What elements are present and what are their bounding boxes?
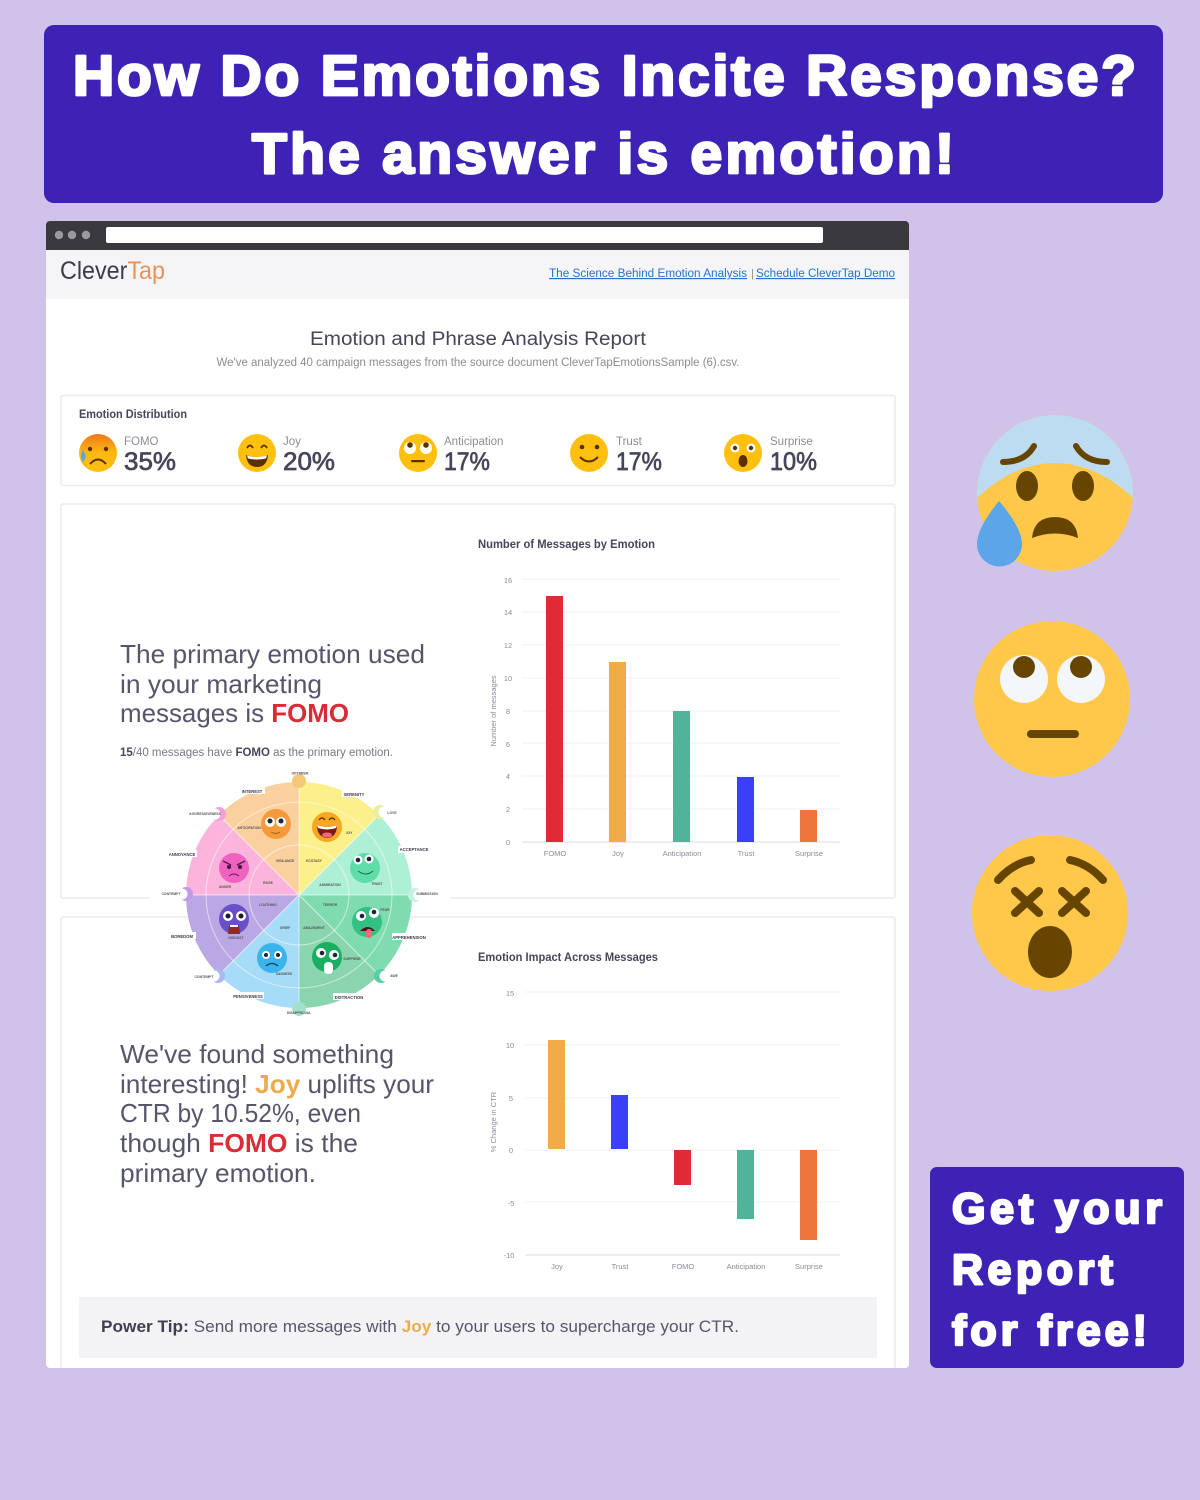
call to action box: Get your — [952, 1185, 1162, 1233]
stat: Trust: Trust — [616, 436, 643, 448]
bar chart: number of messages by emotion: 14 — [504, 608, 512, 617]
stat: Trust: 17% — [616, 448, 662, 476]
title banner: The answer is emotion! — [252, 122, 954, 186]
impact statement: interesting! Joy uplifts your — [120, 1069, 434, 1099]
bar chart: emotion impact across messages: 5 — [509, 1094, 513, 1103]
wheel face: anticipation — [261, 809, 291, 839]
stat: FOMO: 35% — [124, 448, 176, 476]
stat: FOMO: FOMO — [124, 436, 159, 448]
browser window report — [46, 221, 909, 1368]
wheel labels: LOVE — [387, 811, 397, 815]
bar chart: number of messages by emotion: 6 — [506, 740, 510, 749]
report header bar — [46, 250, 909, 299]
bar chart: number of messages by emotion: 12 — [504, 641, 512, 650]
stat: Trust — [570, 434, 662, 476]
wheel labels: SERENITY — [344, 792, 365, 797]
wheel labels: ANGER — [219, 885, 232, 889]
wheel labels: TRUST — [371, 882, 384, 886]
wheel labels: ANTICIPATION — [237, 826, 261, 830]
wheel labels: TERROR — [323, 903, 338, 907]
wheel labels: APPREHENSION — [392, 935, 426, 940]
stat: Anticipation — [399, 434, 503, 476]
bar chart: emotion impact across messages: Surprise — [795, 1262, 823, 1271]
bar chart: emotion impact across messages: Joy — [551, 1262, 563, 1271]
bar chart: number of messages by emotion: 16 — [504, 576, 512, 585]
stat: Anticipation: Anticipation — [444, 436, 503, 448]
icon: anxious face with sweat — [977, 415, 1133, 571]
wheel face: anger — [219, 853, 249, 883]
report header bar: | — [751, 268, 754, 280]
wheel labels: INTEREST — [242, 789, 263, 794]
panel: primary emotion — [61, 504, 895, 898]
stat: FOMO — [79, 434, 176, 476]
wheel labels: AMAZEMENT — [303, 926, 326, 930]
wheel labels: BOREDOM — [171, 934, 193, 939]
primary emotion statement: messages is FOMO — [120, 698, 349, 728]
icon: dizzy shocked face — [972, 835, 1128, 991]
bar chart: number of messages by emotion — [478, 539, 840, 858]
bar chart: emotion impact across messages: 0 — [509, 1146, 513, 1155]
bar chart: number of messages by emotion: 10 — [504, 674, 512, 683]
wheel sectors — [176, 774, 424, 1016]
browser frame — [46, 221, 909, 1368]
report heading: Emotion and Phrase Analysis Report — [310, 329, 647, 350]
report header bar: Schedule CleverTap Demo — [756, 268, 895, 280]
stat: Joy — [238, 434, 335, 476]
bar chart: number of messages by emotion: Trust — [738, 849, 755, 858]
stat: Joy: Joy — [283, 436, 301, 448]
bar chart: number of messages by emotion: Anticipation — [663, 849, 701, 858]
wheel labels: DISAPPROVAL — [287, 1011, 311, 1015]
bar chart: number of messages by emotion: Number of Messages by Emotion — [478, 539, 655, 551]
wheel face: trust — [350, 853, 380, 883]
bar chart: emotion impact across messages: 10 — [506, 1041, 514, 1050]
stat: Joy: 20% — [283, 448, 335, 476]
wheel face: fear — [352, 907, 382, 938]
power tip callout — [79, 1297, 877, 1358]
wheel labels: CONTEMPT — [194, 975, 214, 979]
wheel labels: ACCEPTANCE — [400, 847, 429, 852]
impact statement: We've found something — [120, 1039, 394, 1069]
stat: Surprise: 10% — [770, 448, 817, 476]
bar chart: number of messages by emotion: 0 — [506, 838, 510, 847]
wheel labels: FEAR — [380, 908, 390, 912]
bar chart: emotion impact across messages: Trust — [612, 1262, 629, 1271]
power tip callout: Power Tip: Send more messages with Joy to your users to supercharge your CTR. — [101, 1317, 739, 1336]
wheel labels: SADNESS — [276, 972, 293, 976]
wheel labels — [161, 772, 438, 1015]
icon: eye-roll face — [974, 621, 1130, 777]
primary emotion footnote: 15/40 messages have FOMO as the primary emotion. — [120, 747, 393, 759]
wheel labels: AWE — [390, 974, 399, 978]
panel: emotion distribution: Emotion Distribution — [79, 409, 187, 421]
wheel labels: DISGUST — [228, 936, 244, 940]
panel: emotion distribution — [61, 396, 895, 486]
impact statement: primary emotion. — [120, 1158, 316, 1188]
impact statement: CTR by 10.52%, even — [120, 1098, 361, 1128]
primary emotion statement: in your marketing — [120, 669, 322, 699]
bar chart: emotion impact across messages: FOMO — [672, 1262, 694, 1271]
wheel labels: SUBMISSION — [416, 892, 438, 896]
wheel labels: ADMIRATION — [319, 883, 341, 887]
wheel face: sadness — [257, 943, 287, 973]
impact statement — [120, 1039, 434, 1188]
wheel labels: LOATHING — [259, 903, 277, 907]
bar chart: emotion impact across messages: -10 — [504, 1251, 514, 1260]
stat: Surprise — [724, 434, 817, 476]
call to action box — [930, 1167, 1184, 1368]
report header bar: CleverTap — [60, 257, 165, 285]
bar chart: number of messages by emotion: Number of messages — [489, 675, 498, 747]
wheel labels: JOY — [346, 831, 353, 835]
wheel face: surprise — [312, 942, 342, 974]
report subheading: We've analyzed 40 campaign messages from the source document CleverTapEmotionsSample (6).csv. — [216, 357, 740, 369]
primary emotion statement — [120, 639, 425, 728]
wheel labels: DISTRACTION — [335, 995, 363, 1000]
wheel labels: OPTIMISM — [292, 772, 309, 776]
call to action box: for free! — [952, 1307, 1147, 1355]
bar chart: number of messages by emotion: 2 — [506, 805, 510, 814]
bar chart: number of messages by emotion: FOMO — [544, 849, 566, 858]
bar chart: emotion impact across messages: 15 — [506, 989, 514, 998]
stat: Surprise: Surprise — [770, 436, 813, 448]
bar chart: emotion impact across messages — [478, 952, 840, 1271]
bar chart: emotion impact across messages: % Change in CTR — [489, 1091, 498, 1152]
wheel labels: AGGRESSIVENESS — [189, 812, 222, 816]
bar chart: emotion impact across messages: -5 — [508, 1199, 514, 1208]
wheel face: joy — [312, 812, 342, 842]
emotion wheel — [150, 772, 450, 1016]
panel: emotion impact — [61, 917, 895, 1368]
bar chart: number of messages by emotion: 4 — [506, 772, 510, 781]
bar chart: number of messages by emotion: Joy — [612, 849, 624, 858]
impact statement: though FOMO is the — [120, 1128, 358, 1158]
wheel labels: VIGILANCE — [276, 859, 295, 863]
bar chart: emotion impact across messages: Anticipation — [727, 1262, 765, 1271]
wheel labels: RAGE — [263, 881, 274, 885]
wheel face: disgust — [219, 904, 249, 934]
call to action box: Report — [952, 1246, 1113, 1294]
wheel labels: GRIEF — [280, 926, 290, 930]
bar chart: number of messages by emotion: Surprise — [795, 849, 823, 858]
primary emotion statement: The primary emotion used — [120, 639, 425, 669]
bar chart: emotion impact across messages: Emotion Impact Across Messages — [478, 952, 658, 964]
report header bar: The Science Behind Emotion Analysis — [549, 268, 747, 280]
title banner: How Do Emotions Incite Response? — [73, 44, 1136, 108]
bar chart: number of messages by emotion: 8 — [506, 707, 510, 716]
wheel labels: SURPRISE — [343, 957, 361, 961]
wheel labels: ANNOYANCE — [169, 852, 196, 857]
title banner — [44, 25, 1163, 203]
stat: Anticipation: 17% — [444, 448, 490, 476]
wheel labels: PENSIVENESS — [233, 994, 263, 999]
wheel labels: ECSTASY — [306, 859, 323, 863]
wheel labels: CONTEMPT — [161, 892, 181, 896]
